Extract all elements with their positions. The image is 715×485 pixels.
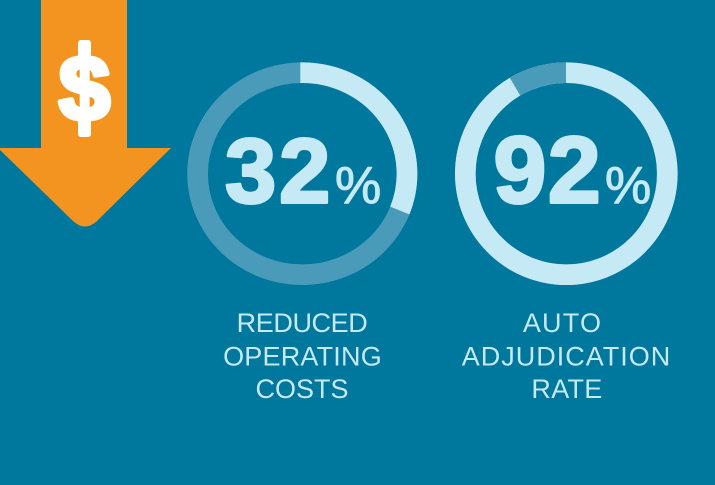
label: reduced operating costs: REDUCED [237, 308, 367, 338]
arrow shape [0, 0, 171, 226]
label: reduced operating costs: COSTS [255, 374, 349, 404]
label: auto adjudication rate [462, 308, 671, 404]
dollar sign: $ [59, 38, 110, 140]
label: auto adjudication rate: ADJUDICATION [462, 342, 671, 372]
icon: orange down arrow with dollar sign [0, 0, 171, 226]
value: 32% [225, 120, 381, 222]
value: 92%: 92 [494, 118, 602, 224]
panel: reduced operating costs [198, 73, 407, 404]
donut chart: 92 percent [465, 73, 667, 275]
label: auto adjudication rate: RATE [531, 374, 603, 404]
value: 92%: % [605, 157, 651, 215]
label: reduced operating costs [223, 308, 382, 404]
value: 92% [494, 118, 651, 224]
value: 32%: % [335, 157, 381, 215]
value: 32%: 32 [225, 120, 333, 222]
label: auto adjudication rate: AUTO [523, 308, 602, 338]
panel: auto adjudication rate [462, 73, 671, 404]
donut chart: 32 percent [198, 73, 407, 275]
label: reduced operating costs: OPERATING [223, 342, 382, 372]
